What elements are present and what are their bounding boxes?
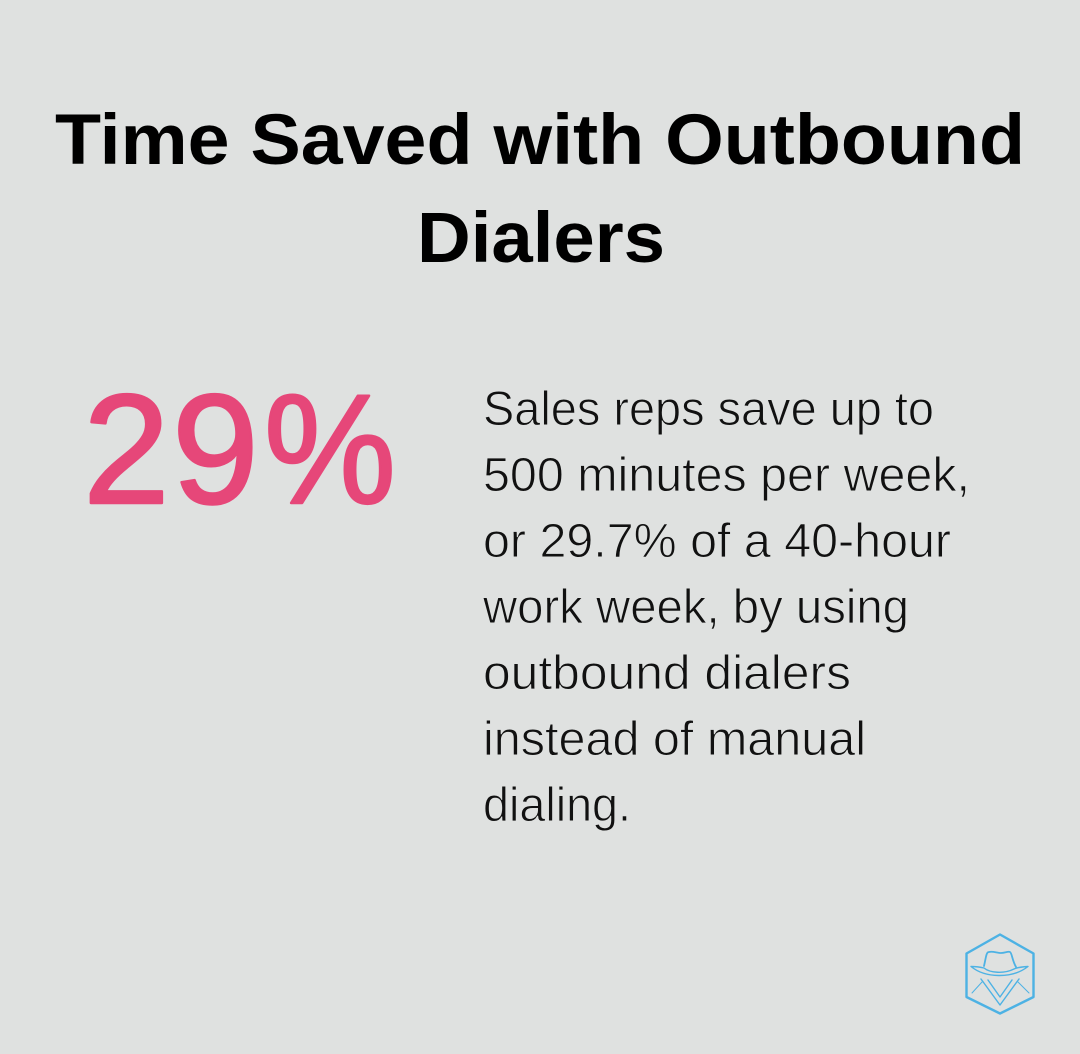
title: Dialers [417, 199, 665, 278]
title [55, 101, 1025, 278]
big statistic: 29%: 9 [172, 363, 259, 537]
title: Time Saved with Outbound [55, 101, 1025, 180]
description text: 500 minutes per week, [483, 449, 970, 502]
description text: dialing. [483, 779, 631, 832]
icon: hexagon spy logo [966, 934, 1034, 1014]
description text: or 29.7% of a 40-hour [483, 515, 951, 568]
big statistic: 29%: % [264, 363, 396, 537]
description text: Sales reps save up to [483, 383, 934, 436]
description text [482, 383, 970, 832]
description text: instead of manual [483, 713, 866, 766]
description text: outbound dialers [483, 647, 851, 700]
description text: work week, by using [482, 581, 909, 634]
big statistic: 29%: 2 [83, 363, 170, 537]
